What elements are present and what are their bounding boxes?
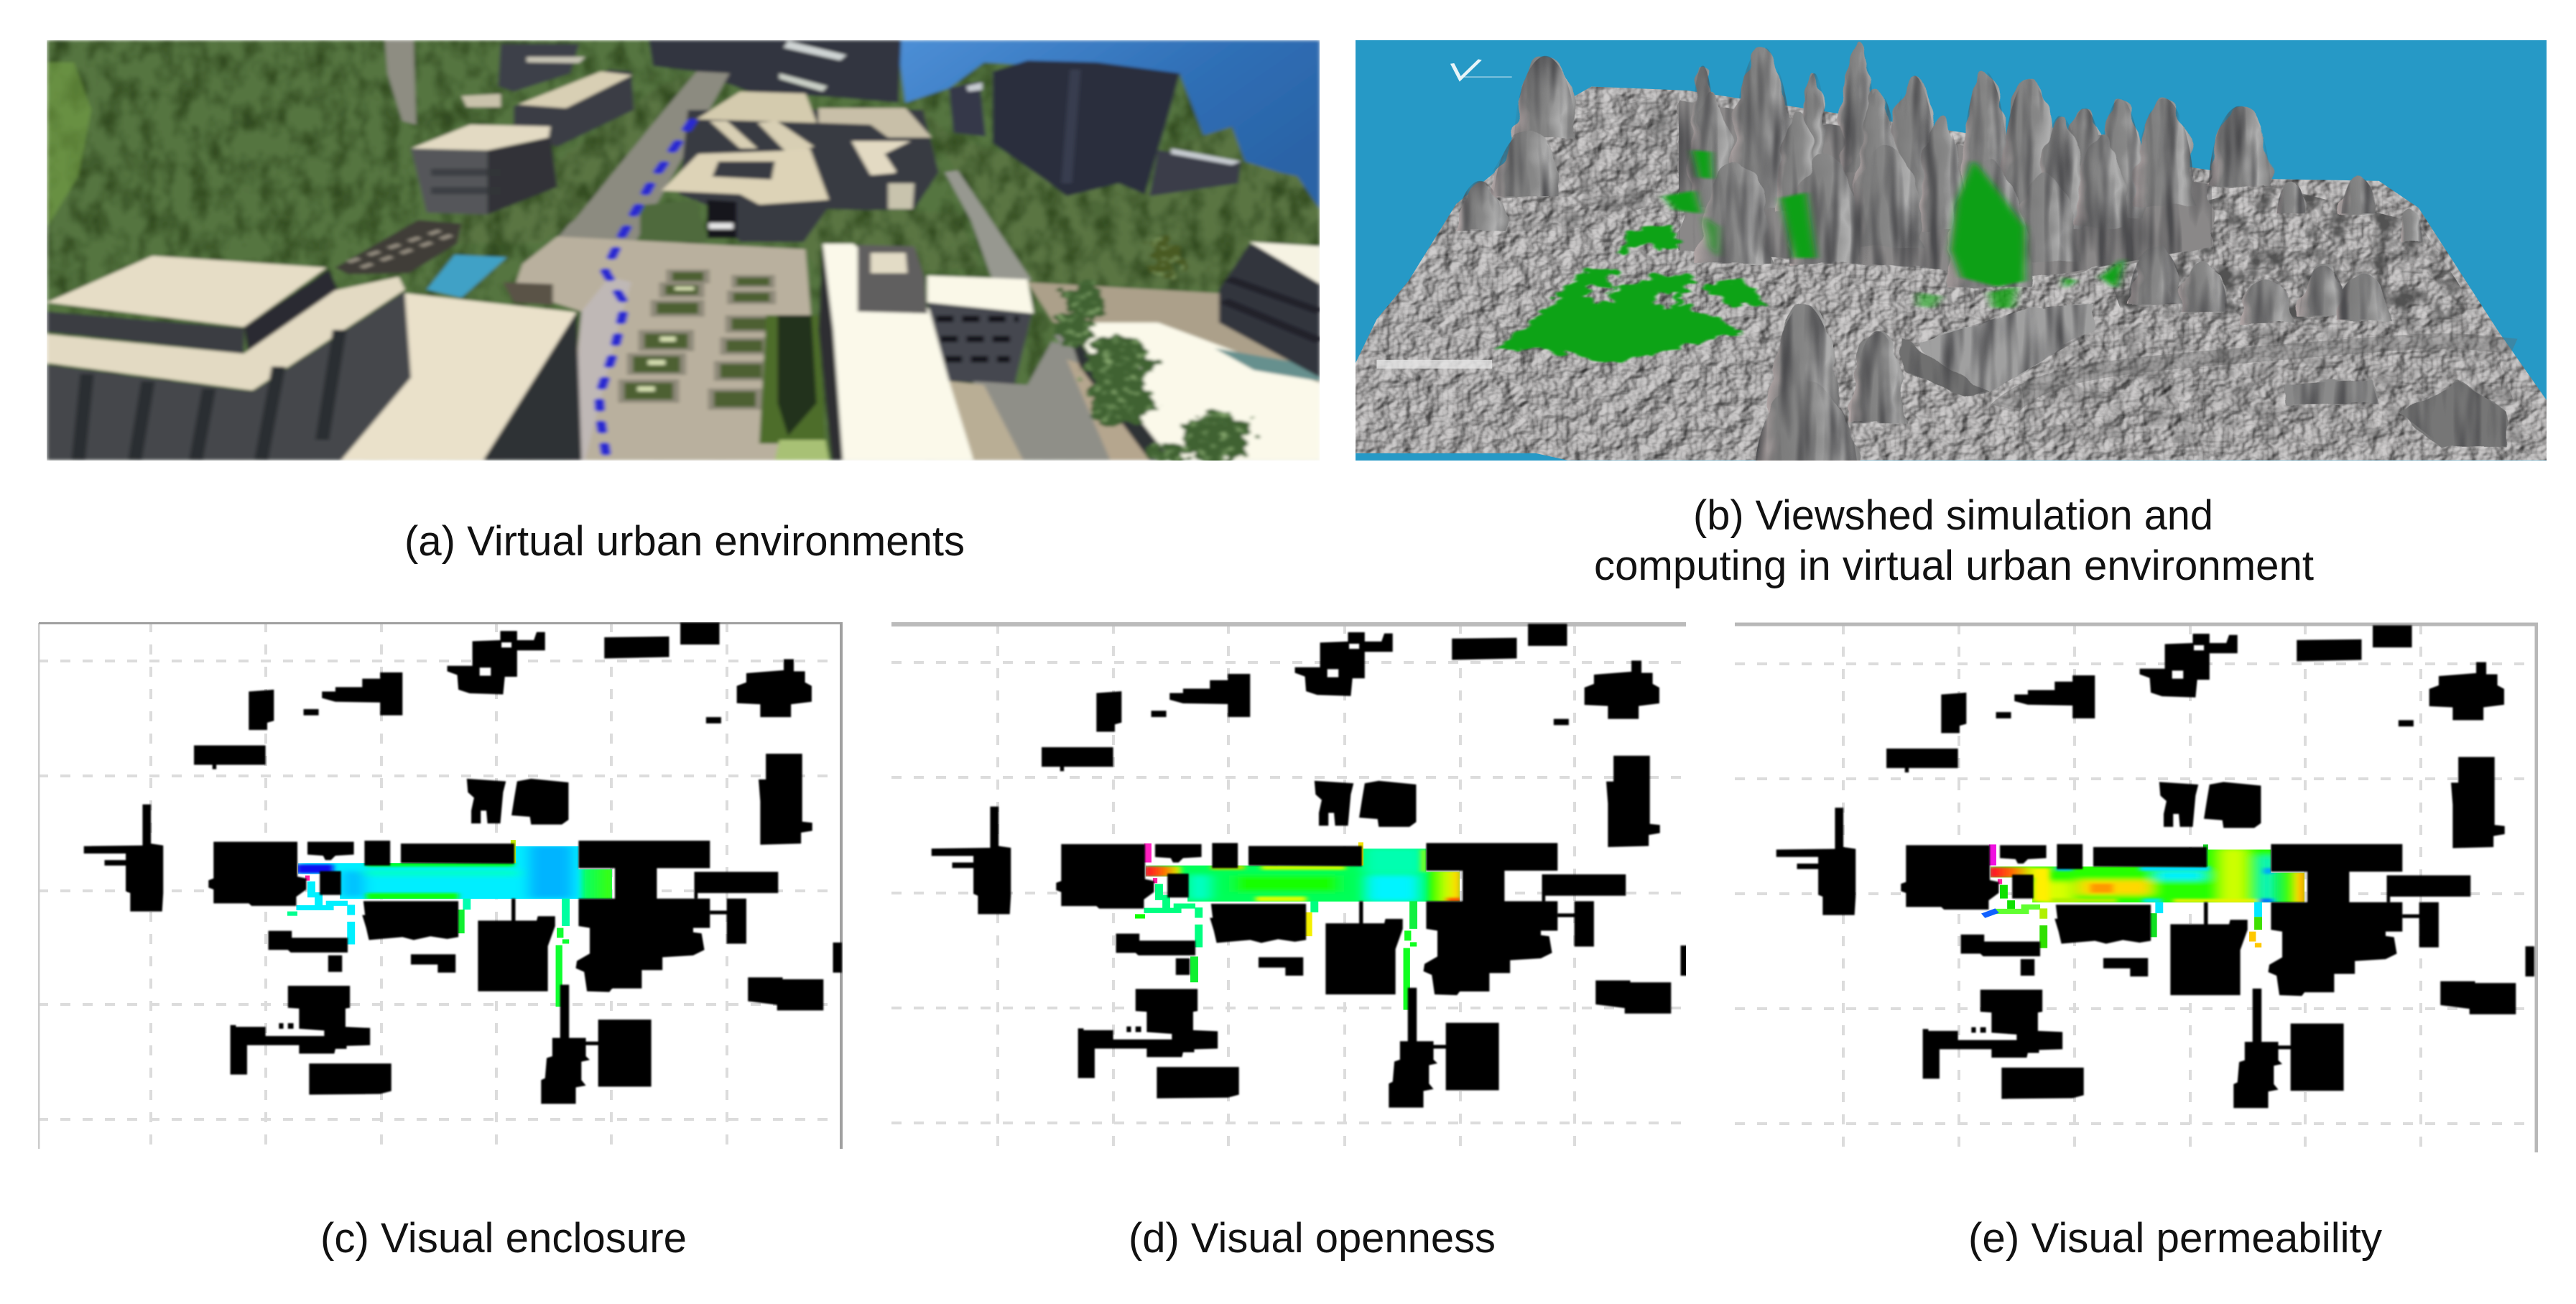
building footprints: [932, 624, 1690, 1108]
trees: [1054, 235, 1251, 463]
box building with cream roof: [411, 124, 557, 214]
caption e: (e) Visual permeability: [1968, 1215, 2382, 1262]
bottom tower block: [1754, 305, 1905, 473]
panel c: visual enclosure map: [38, 622, 842, 1150]
panel a: virtual urban environment 3D scene: [47, 40, 1320, 463]
heatmap: corridor c: [287, 838, 631, 1007]
right plaza: [1027, 282, 1320, 389]
panel b: viewshed simulation terrain: [1353, 39, 2550, 473]
bottom-left building: [47, 256, 582, 460]
right road: [945, 170, 1032, 280]
plaza planters: [618, 269, 776, 410]
swimming pool: [427, 255, 506, 297]
central plaza: [514, 236, 823, 460]
grey terrain relief: [1356, 87, 2547, 461]
dark mottled urban texture: [1456, 93, 2530, 443]
forest hillside: [47, 40, 1320, 460]
green hedge: [759, 315, 829, 460]
mid terrace buildings: [1901, 304, 2506, 446]
caption b: computing in virtual urban environment: [1594, 542, 2314, 589]
observer label smudge: [1376, 360, 1492, 369]
far left building: [461, 70, 634, 147]
frame: [1735, 624, 2536, 1152]
far trees right: [1201, 125, 1320, 217]
parking area: [335, 220, 553, 305]
grid: [38, 622, 842, 1150]
caption b: (b) Viewshed simulation and: [1693, 492, 2213, 539]
green viewshed on ground: [1492, 227, 1766, 364]
caption c: (c) Visual enclosure: [320, 1215, 687, 1262]
back cluster: [498, 40, 902, 103]
heatmap: corridor e: [1983, 841, 2324, 1011]
right cream roof: [1071, 323, 1320, 460]
building footprints: [84, 623, 842, 1104]
dense tower mass and peaks: [1456, 42, 2422, 323]
view axis marker: [1453, 60, 1512, 79]
lower right street: [973, 323, 1167, 460]
caption a: (a) Virtual urban environments: [404, 518, 965, 565]
walkthrough path: [599, 121, 692, 460]
frame: [891, 622, 1686, 626]
grid: [1735, 624, 2537, 1152]
frame: [39, 623, 841, 1149]
green bank: [570, 155, 626, 223]
mid office block: [927, 276, 1034, 385]
caption d: (d) Visual openness: [1129, 1215, 1496, 1262]
grid: [891, 624, 1686, 1158]
green viewshed on towers: [1663, 150, 2124, 307]
blue background: [1353, 39, 2550, 462]
panel e: visual permeability map: [1735, 624, 2537, 1152]
central complex: [637, 89, 940, 244]
right cream long building: [818, 244, 973, 460]
sky: [896, 40, 1320, 216]
heatmap: corridor d: [1135, 841, 1479, 1010]
building footprints: [1776, 625, 2534, 1108]
road strip: [557, 71, 730, 242]
skyscrapers: [949, 60, 1241, 196]
caption b: [1594, 492, 2314, 589]
panel d: visual openness map: [891, 624, 1690, 1158]
right dark building: [1219, 242, 1320, 378]
